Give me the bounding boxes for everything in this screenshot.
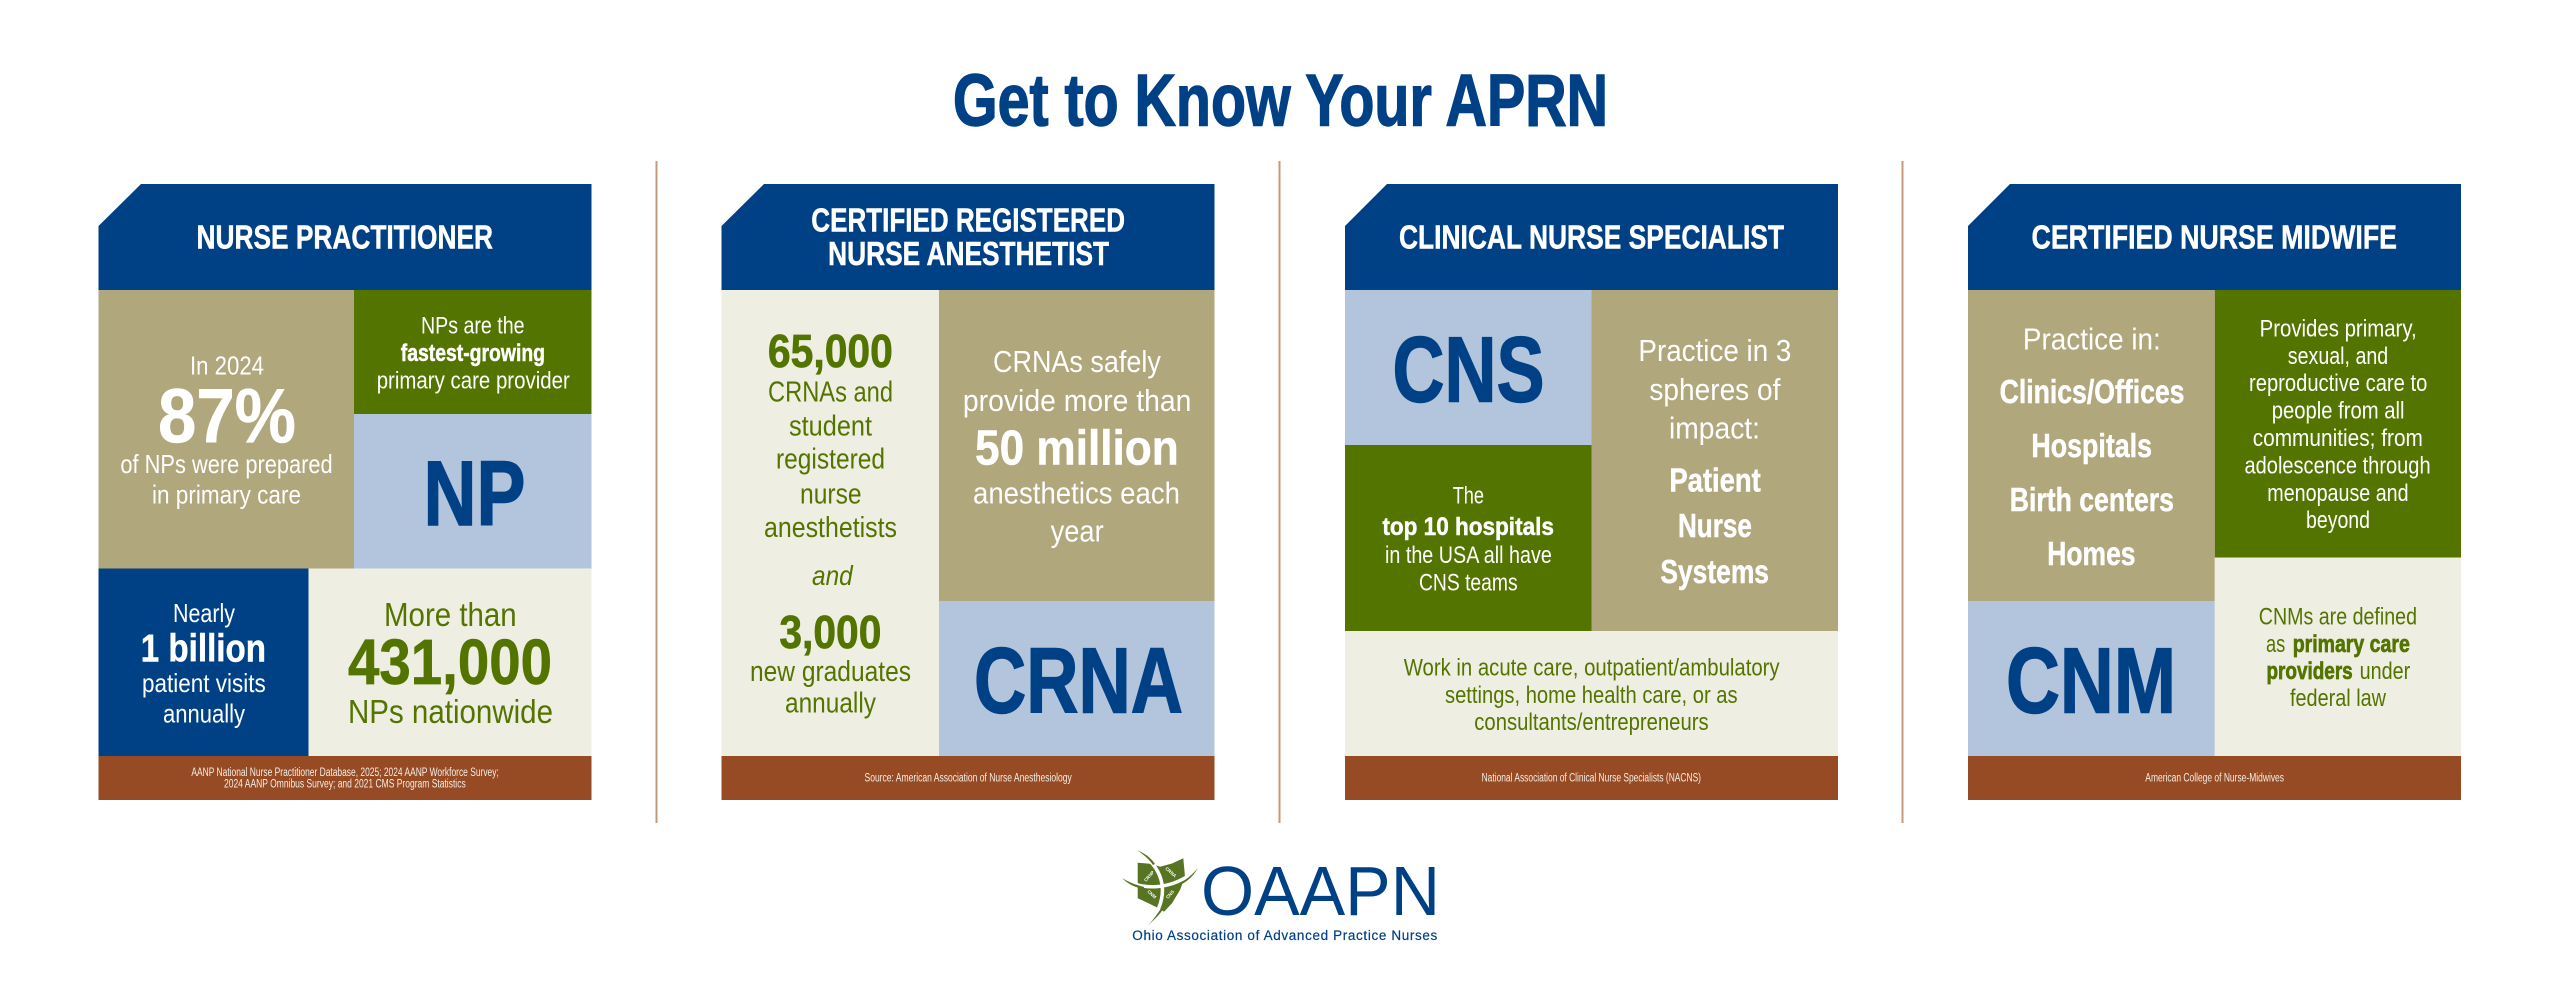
source footer: Source: American Association of Nurse Anesthesiology	[864, 772, 1072, 784]
stat block: 87 percent: in primary care	[152, 479, 301, 509]
text block: primary care providers	[2215, 558, 2461, 756]
stat block: workforce numbers: annually	[785, 687, 877, 719]
text block: primary care providers: under	[2360, 658, 2410, 685]
acronym: NP: NP	[424, 443, 526, 545]
stat block: workforce numbers: anesthetists	[764, 512, 897, 544]
header: certified nurse midwife: CERTIFIED NURSE MIDWIFE	[2032, 218, 2397, 255]
stat block: 50 million: CRNAs safely	[993, 344, 1161, 379]
stat block: 431,000	[308, 568, 592, 756]
stat block: 87 percent	[98, 290, 354, 568]
text block: practice settings: Hospitals	[2031, 427, 2152, 464]
stat block: workforce numbers: and	[812, 560, 854, 591]
text block: top 10 hospitals: in the USA all have	[1385, 542, 1552, 569]
stat block: workforce numbers: 3,000	[779, 606, 881, 658]
text block: spheres of impact: spheres of	[1649, 372, 1781, 407]
text block: work settings	[1345, 631, 1838, 756]
stat block: 431,000: NPs nationwide	[348, 693, 553, 730]
text block: spheres of impact	[1592, 290, 1838, 631]
stat block: 431,000: More than	[384, 596, 517, 633]
stat block: workforce numbers: CRNAs and	[768, 376, 893, 408]
text block: care provided: Provides primary,	[2260, 316, 2417, 342]
tagline: Ohio Association of Advanced Practice Nurses	[1132, 928, 1438, 943]
logo: OAAPN	[1122, 850, 1440, 943]
stat block: 50 million: provide more than	[963, 383, 1191, 418]
stat block: workforce numbers: 65,000	[768, 325, 893, 377]
stat block: 1 billion	[98, 568, 308, 756]
source footer: 2024 AANP Omnibus Survey; and 2021 CMS Program Statistics	[224, 778, 466, 790]
source footer	[1968, 756, 2461, 800]
text block: fastest-growing	[354, 290, 592, 414]
text block: care provided: sexual, and	[2288, 343, 2388, 370]
source footer	[1345, 756, 1838, 800]
text block: care provided: reproductive care to	[2249, 370, 2427, 397]
icon: Ohio leaf emblem: CNM	[1146, 889, 1157, 900]
text block: practice settings	[1968, 290, 2215, 601]
acronym: CNS	[1345, 290, 1592, 445]
panel: certified nurse midwife	[1968, 184, 2461, 800]
stat block: workforce numbers: nurse	[800, 478, 862, 510]
text block: care provided: beyond	[2306, 507, 2370, 534]
header: certified registered nurse anesthetist	[722, 184, 1214, 290]
stat block: 87 percent: of NPs were prepared	[120, 449, 333, 479]
header: clinical nurse specialist	[1345, 184, 1838, 290]
wordmark: OAAPN	[1201, 852, 1440, 930]
text block: primary care providers: federal law	[2290, 685, 2387, 712]
header: certified registered nurse anesthetist: CERTIFIED REGISTERED	[811, 202, 1125, 238]
stat block: workforce numbers: new graduates	[750, 656, 911, 688]
source footer	[98, 756, 592, 800]
stat block: 50 million: 50 million	[975, 421, 1179, 475]
panel: nurse practitioner	[98, 184, 592, 800]
text block: spheres of impact: Practice in 3	[1638, 333, 1791, 368]
stat block: 1 billion: 1 billion	[141, 628, 266, 671]
text block: care provided: people from all	[2272, 397, 2404, 424]
header: clinical nurse specialist: CLINICAL NURSE SPECIALIST	[1399, 218, 1784, 255]
text block: practice settings: Birth centers	[2010, 481, 2174, 518]
panel: clinical nurse specialist	[1345, 184, 1838, 800]
text block: spheres of impact: Patient	[1669, 462, 1761, 499]
text block: work settings: consultants/entrepreneurs	[1474, 709, 1709, 736]
text block: spheres of impact: Nurse	[1678, 507, 1752, 544]
text block: practice settings: Clinics/Offices	[2000, 373, 2184, 410]
stat block: 431,000: 431,000	[348, 626, 552, 698]
text block: practice settings: Practice in:	[2023, 322, 2161, 356]
text block: fastest-growing: NPs are the	[421, 312, 524, 339]
stat block: 1 billion: Nearly	[173, 598, 235, 628]
stat block: workforce numbers: student	[789, 410, 872, 442]
text block: spheres of impact: Systems	[1660, 553, 1769, 590]
text block: top 10 hospitals: top 10 hospitals	[1382, 513, 1554, 541]
text block: fastest-growing: fastest-growing	[401, 340, 545, 367]
stat block: 50 million	[939, 290, 1214, 601]
acronym: CNM: CNM	[2006, 628, 2176, 732]
stat block: workforce numbers	[722, 290, 939, 756]
stat block: 50 million: anesthetics each	[973, 475, 1180, 510]
header: certified registered nurse anesthetist: NURSE ANESTHETIST	[828, 235, 1109, 272]
text block: care provided	[2215, 290, 2461, 558]
source footer: AANP National Nurse Practitioner Database, 2025; 2024 AANP Workforce Survey;	[191, 767, 499, 779]
stat block: 87 percent: 87%	[158, 374, 296, 460]
panel: certified registered nurse anesthetist	[722, 184, 1214, 800]
source footer	[722, 756, 1214, 800]
acronym: NP	[354, 414, 592, 568]
stat block: 1 billion: patient visits	[142, 668, 266, 698]
title: Get to Know Your APRN	[953, 60, 1608, 142]
header: certified nurse midwife	[1968, 184, 2461, 290]
text block: top 10 hospitals: The	[1453, 482, 1484, 509]
stat block: 1 billion: annually	[163, 698, 245, 728]
icon: Ohio leaf emblem: CRNA	[1164, 866, 1178, 879]
header: nurse practitioner	[98, 184, 592, 290]
text block: care provided: adolescence through	[2244, 452, 2431, 480]
source footer: American College of Nurse-Midwives	[2145, 772, 2284, 784]
text block: fastest-growing: primary care provider	[377, 368, 570, 394]
header: nurse practitioner: NURSE PRACTITIONER	[196, 218, 493, 255]
source footer: National Association of Clinical Nurse Specialists (NACNS)	[1482, 772, 1701, 784]
acronym: CRNA: CRNA	[974, 628, 1183, 732]
text block: primary care providers: primary care	[2293, 631, 2410, 658]
text block: top 10 hospitals	[1345, 445, 1592, 631]
text block: work settings: Work in acute care, outpatient/ambulatory	[1404, 655, 1780, 682]
icon: Ohio leaf emblem: CNS	[1165, 889, 1175, 900]
text block: primary care providers: CNMs are defined	[2259, 603, 2417, 630]
acronym: CNM	[1968, 601, 2215, 756]
acronym: CNS: CNS	[1392, 318, 1544, 422]
text block: top 10 hospitals: CNS teams	[1419, 570, 1518, 597]
text block: practice settings: Homes	[2047, 535, 2136, 572]
text block: care provided: menopause and	[2267, 480, 2409, 507]
stat block: workforce numbers: registered	[776, 444, 885, 476]
text block: spheres of impact: impact:	[1669, 410, 1760, 445]
icon: Ohio leaf emblem: CRNP	[1143, 870, 1155, 883]
text block: care provided: communities; from	[2253, 425, 2423, 452]
acronym: CRNA	[939, 601, 1214, 756]
stat block: 50 million: year	[1051, 514, 1104, 549]
text block: work settings: settings, home health care, or as	[1445, 682, 1738, 709]
icon: Ohio leaf emblem	[1122, 850, 1198, 926]
text block: primary care providers: providers	[2266, 658, 2353, 685]
stat block: 87 percent: In 2024	[190, 351, 264, 381]
text block: primary care providers: as	[2266, 631, 2285, 658]
